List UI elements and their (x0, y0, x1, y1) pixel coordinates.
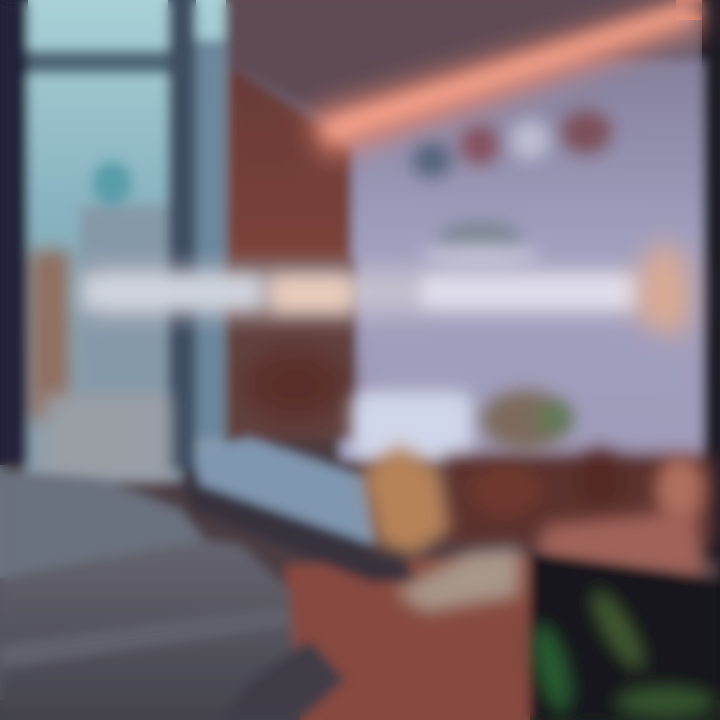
pink side table (535, 510, 705, 578)
LED ceiling strip (308, 0, 702, 158)
wall lamp glow (639, 243, 691, 347)
glowing horizontal band (85, 270, 645, 314)
pillows (352, 392, 472, 460)
base lower room tone (0, 430, 720, 720)
wall art row (412, 110, 612, 178)
lower wall tone (385, 335, 685, 395)
bed base (180, 470, 415, 582)
window with city view (25, 0, 225, 480)
foreground green leaves (525, 583, 715, 718)
red-brown accent wall (222, 65, 357, 440)
floor (285, 555, 545, 720)
orange throw pillow (362, 445, 450, 555)
wall shelf ornament (420, 222, 540, 264)
right dark edge (703, 0, 720, 560)
bedside plants and furniture (445, 390, 715, 545)
left dark window frame (0, 0, 28, 465)
back wall (340, 60, 720, 460)
ceiling (120, 0, 720, 118)
foreground dark cabinet (530, 552, 720, 720)
bed blanket (195, 438, 375, 545)
rug (395, 548, 520, 612)
foreground gray sofa (0, 470, 345, 720)
